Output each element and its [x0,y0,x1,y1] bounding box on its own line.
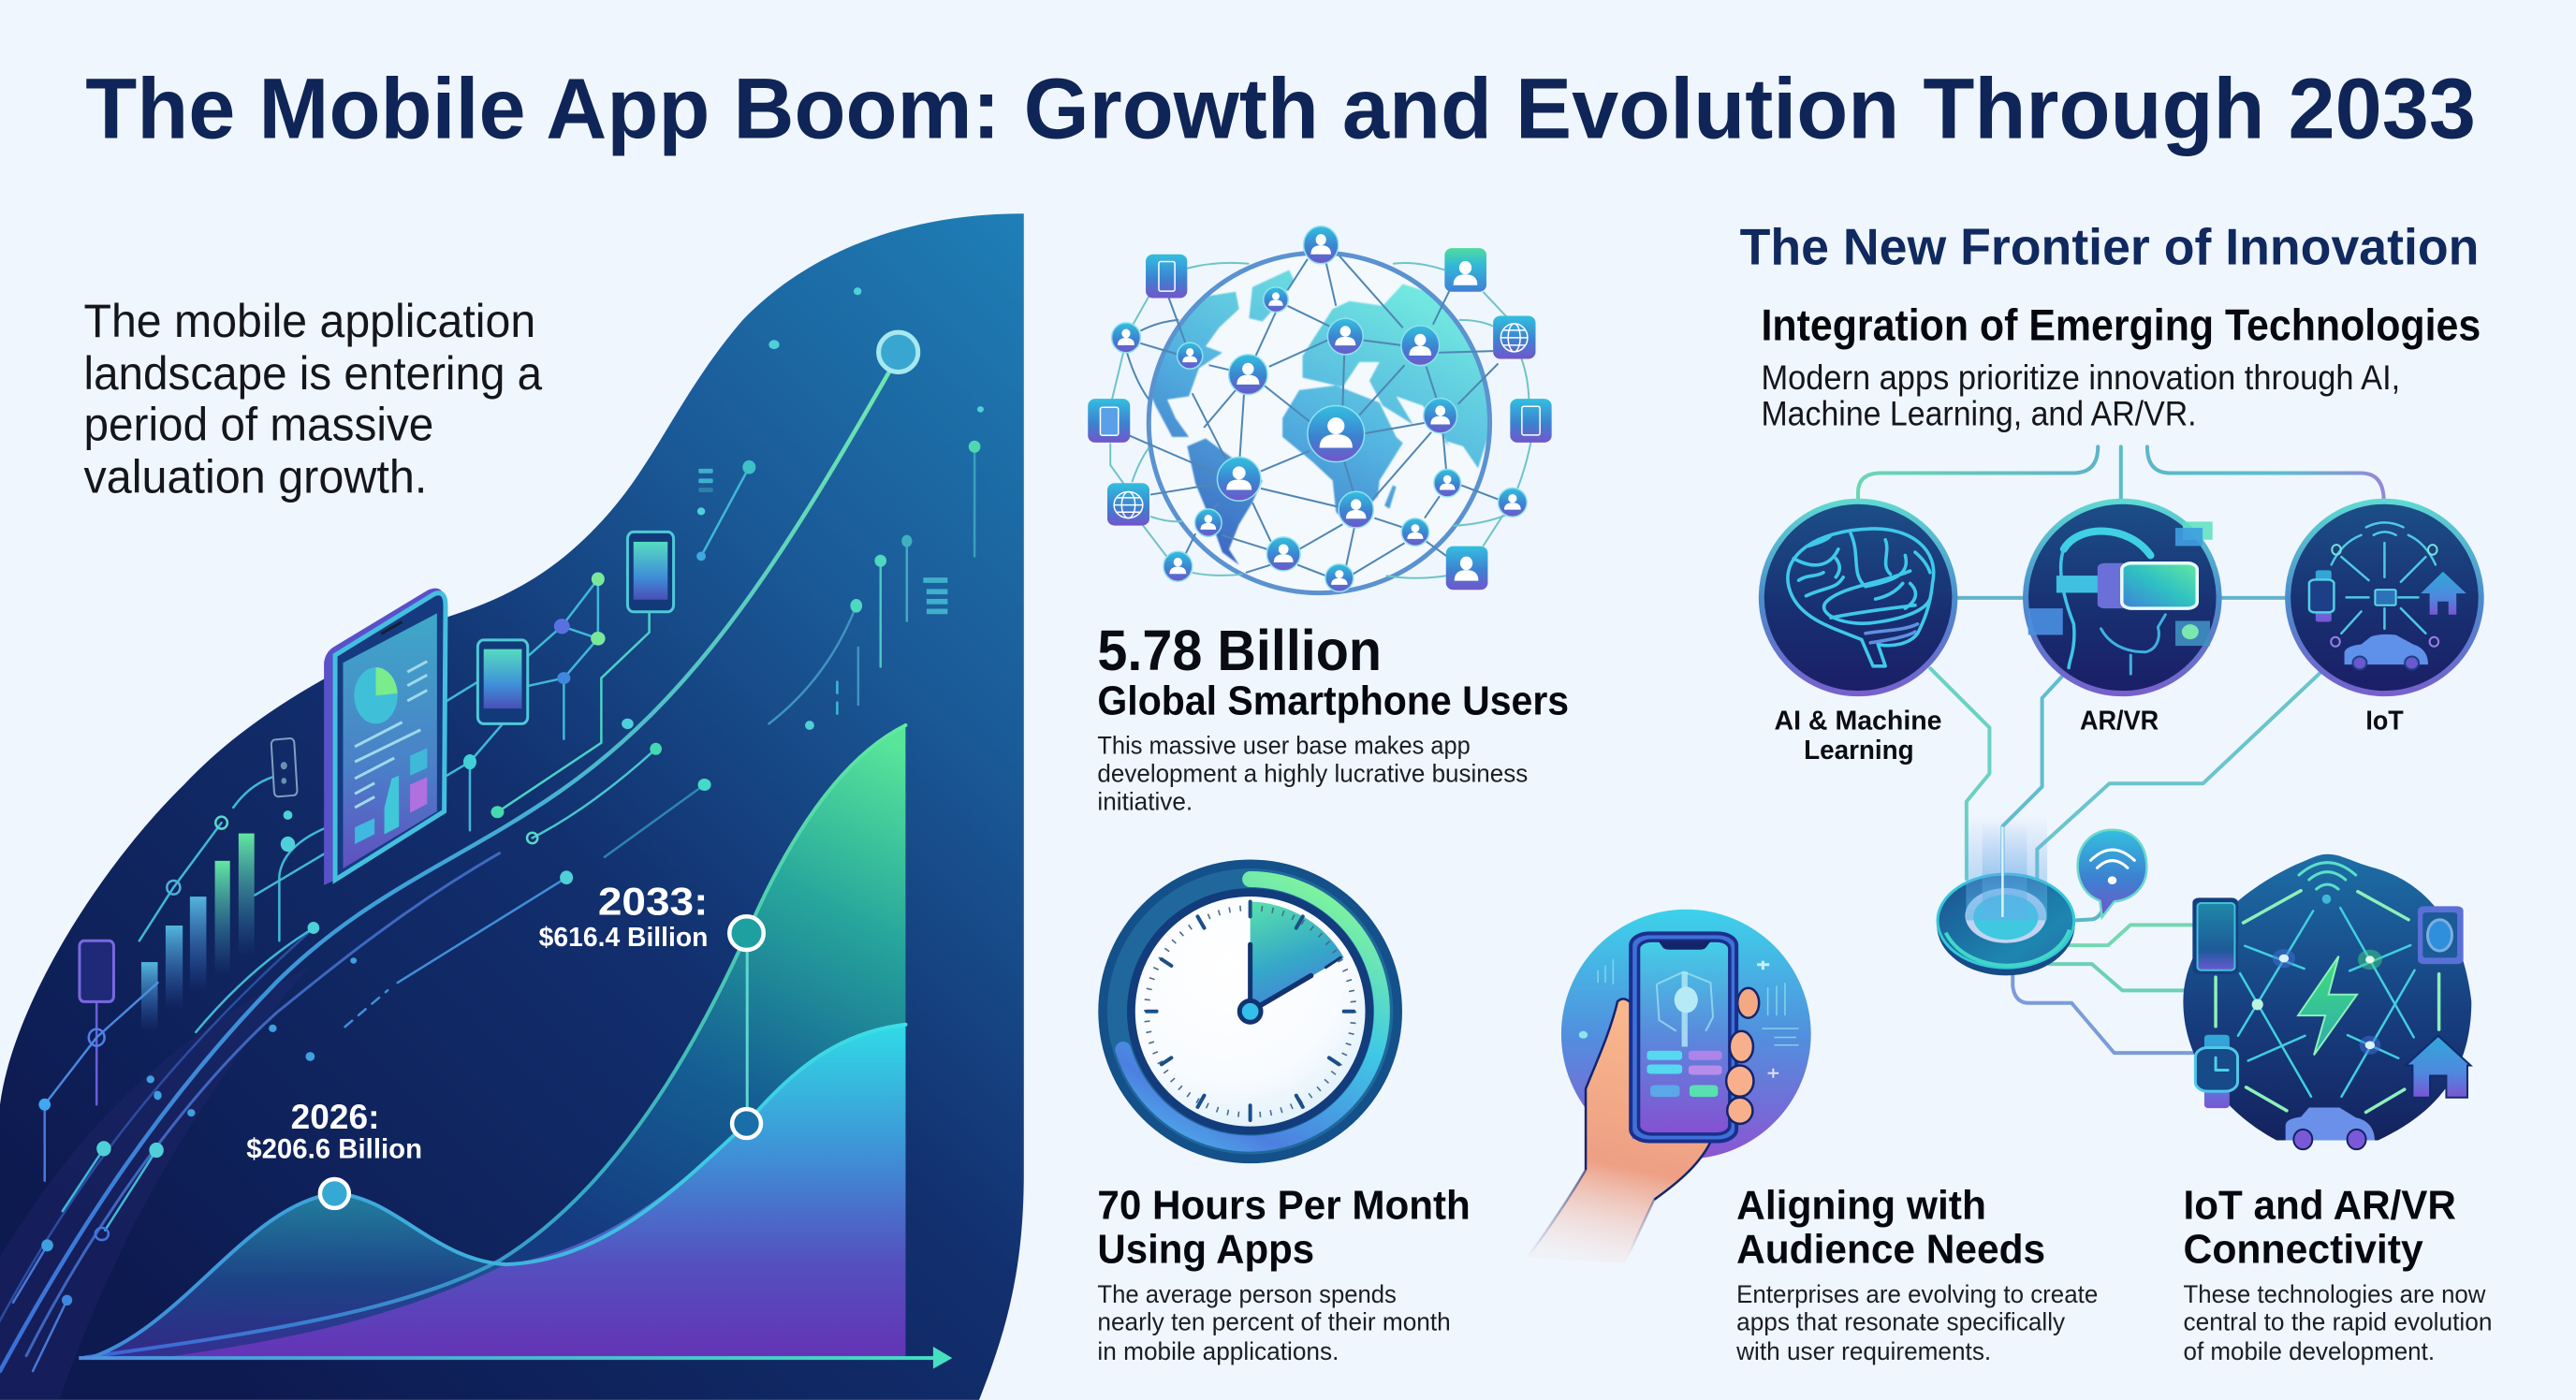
watch [2309,570,2334,621]
icon: wifi bubble [2078,830,2146,917]
tech labels: IoT [2365,706,2404,736]
forearm and palm [1527,999,1710,1263]
swoosh band [0,968,309,1400]
intro text: valuation growth. [84,451,427,503]
screen buttons [1647,1051,1721,1097]
top marker [879,332,918,372]
hour ticks [1147,902,1354,1120]
text: connectivity: central to the rapid evolution [2184,1308,2492,1336]
stat: smartphone users [1097,619,1569,815]
title: The Mobile App Boom: Growth and Evolution Through 2033 [85,60,2476,156]
device: house [2406,1036,2470,1098]
axis arrow [79,1347,952,1369]
square app icons [1088,248,1552,590]
text: audience needs [1735,1182,2098,1365]
floating panels [2028,521,2213,646]
intro text: The mobile application [84,295,535,347]
stat: smartphone users: development a highly lucrative business [1097,759,1528,787]
subheading and intro text [1761,300,2481,433]
text: audience needs: Enterprises are evolving to create [1736,1280,2098,1308]
icon: phone upper right [627,532,674,612]
stat: hours per month: Using Apps [1097,1227,1314,1273]
marker 2026 [320,1179,349,1208]
circuit rings [89,817,537,1240]
device: phone [2192,897,2238,974]
label: 2033 value [539,880,708,953]
text: connectivity [2184,1182,2492,1365]
stat: smartphone users: This massive user base makes app [1097,732,1471,760]
heading: new frontier: The New Frontier of Innovation [1740,219,2479,276]
stat: hours per month: in mobile applications. [1097,1337,1339,1365]
marker 2033 lower [732,1109,761,1138]
minute ticks [1147,908,1354,1115]
device: watch [2195,1035,2237,1108]
device: tablet [2418,906,2464,964]
thin circuit lines [13,446,974,1371]
inner link lines [1127,255,1498,576]
car [2345,634,2428,664]
small stacked bars [698,469,947,614]
network nodes [2252,949,2382,1055]
hub connectors [2012,911,2193,1053]
house [2421,572,2466,615]
curve cyan [92,1025,905,1357]
stat: smartphone users: Global Smartphone Users [1097,678,1569,723]
growth area hump [92,1025,905,1357]
connector lines [1858,446,2384,920]
subheading and intro text: Modern apps prioritize innovation through AI, [1761,358,2400,397]
hub chip [2375,590,2396,605]
continents [1146,270,1493,565]
stat: hours per month: 70 Hours Per Month [1097,1182,1471,1228]
icon: large phone dashboard [324,589,446,885]
icon: IoT circle [2288,502,2481,693]
progress ring [1123,880,1382,1144]
disc decorations [1598,959,1799,1045]
IoT links [2332,522,2436,634]
label: 2033 value: 2033: [598,880,708,924]
device: car [2286,1107,2375,1149]
clock face [1135,897,1365,1127]
icon: AR/VR circle [2026,502,2219,693]
elapsed wedge [1251,902,1344,1012]
tech labels: AI & Machine [1775,706,1942,736]
stat: hours per month [1097,1182,1471,1365]
globe outline [1149,253,1490,593]
intro text [84,295,542,503]
clock hands [1251,944,1340,1012]
icon: IoT network blob [2183,854,2471,1140]
label: 2026 value: 2026: [291,1098,379,1136]
growth bars [141,834,255,1030]
long growth trendlines [0,370,890,1371]
stat: hours per month: nearly ten percent of their month [1097,1308,1451,1336]
phone screen [1639,941,1730,1134]
icon: phone middle [477,640,528,723]
icon: tiny phone [271,738,298,797]
headset [2056,576,2103,592]
phone body [1631,933,1736,1141]
text: connectivity: IoT and AR/VR [2184,1182,2456,1228]
lightning bolt [2298,956,2357,1055]
text: audience needs: Aligning with [1736,1182,1986,1228]
stat: smartphone users: initiative. [1097,787,1193,815]
icon: clock [1098,859,1402,1163]
tech labels [1775,706,2404,766]
globe body [1149,253,1490,593]
text: connectivity: of mobile development. [2184,1337,2435,1365]
icon: hand holding phone [1527,910,1811,1263]
stat: hours per month: The average person spends [1097,1280,1397,1308]
label: 2033 value: $616.4 Billion [539,923,708,953]
icon: AI brain circle [1762,502,1954,693]
head and strap [2064,531,2150,555]
back finger [1737,988,1759,1018]
text: audience needs: apps that resonate specifically [1736,1308,2066,1336]
brain outline [1788,529,1934,666]
screen emblem [1657,971,1713,1031]
subheading and intro text: Machine Learning, and AR/VR. [1761,395,2197,433]
text: connectivity: These technologies are now [2184,1280,2486,1308]
growth area green [85,725,905,1357]
tech labels: Learning [1804,736,1914,766]
panel background shape [0,213,1024,1400]
connector between markers [746,933,749,1124]
intro text: landscape is entering a [84,347,542,400]
outer link arcs [1110,263,1530,578]
fingers [1726,1031,1753,1124]
panel: market growth chart [0,213,1024,1400]
curve green [85,725,905,1357]
text: connectivity: Connectivity [2184,1227,2423,1273]
label: 2026 value: $206.6 Billion [246,1133,422,1164]
icon: phone left outline [80,941,113,1001]
icon: hub disc [1937,814,2075,975]
gradient disc [1561,910,1811,1159]
circuit dots [38,287,984,1305]
tech labels: AR/VR [2080,706,2159,736]
stat: smartphone users: 5.78 Billion [1097,619,1382,683]
network glowing links [2216,891,2439,1112]
growth area cyan [165,1025,905,1357]
subheading and intro text: Integration of Emerging Technologies [1761,300,2481,350]
text: audience needs: Audience Needs [1736,1227,2045,1273]
text: audience needs: with user requirements. [1735,1337,1991,1365]
intro text: period of massive [84,398,433,450]
wifi arcs [2299,863,2356,889]
icon: network globe [1088,226,1552,593]
user nodes [1112,226,1527,591]
label: 2026 value [246,1098,422,1164]
marker 2033 upper [729,916,764,950]
connectivity hub diagram [1937,814,2471,1149]
